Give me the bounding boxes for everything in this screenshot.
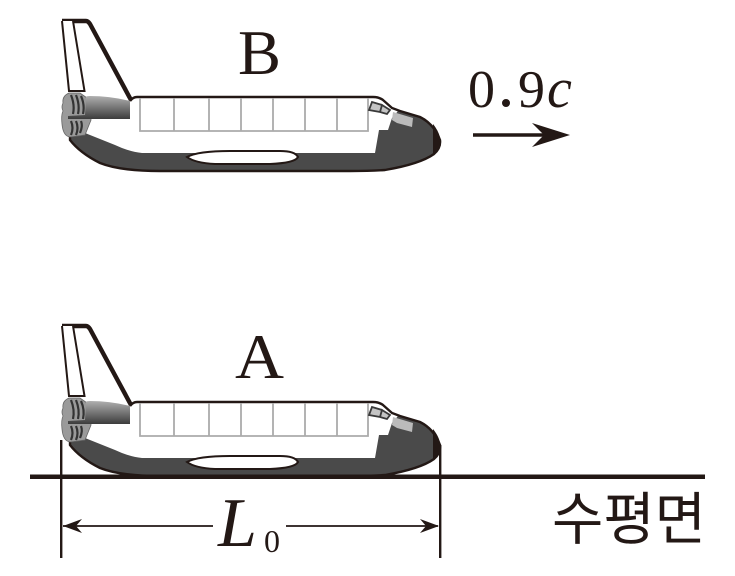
shuttle A [62,326,440,476]
length label: L [217,485,257,562]
velocity label: 9 [518,61,545,119]
surface label: 수평면 [552,488,706,552]
label A: A [235,322,285,392]
diagram: 0 [264,523,280,559]
ground line [30,474,705,479]
shuttle B [62,21,440,171]
left extension line [60,440,62,558]
label B: B [238,18,281,88]
right extension line [439,445,441,558]
velocity arrow [473,123,570,147]
velocity label [468,58,572,120]
velocity label: c [547,58,572,120]
length dimension arrow [63,519,439,533]
velocity label: 0 [468,61,495,119]
